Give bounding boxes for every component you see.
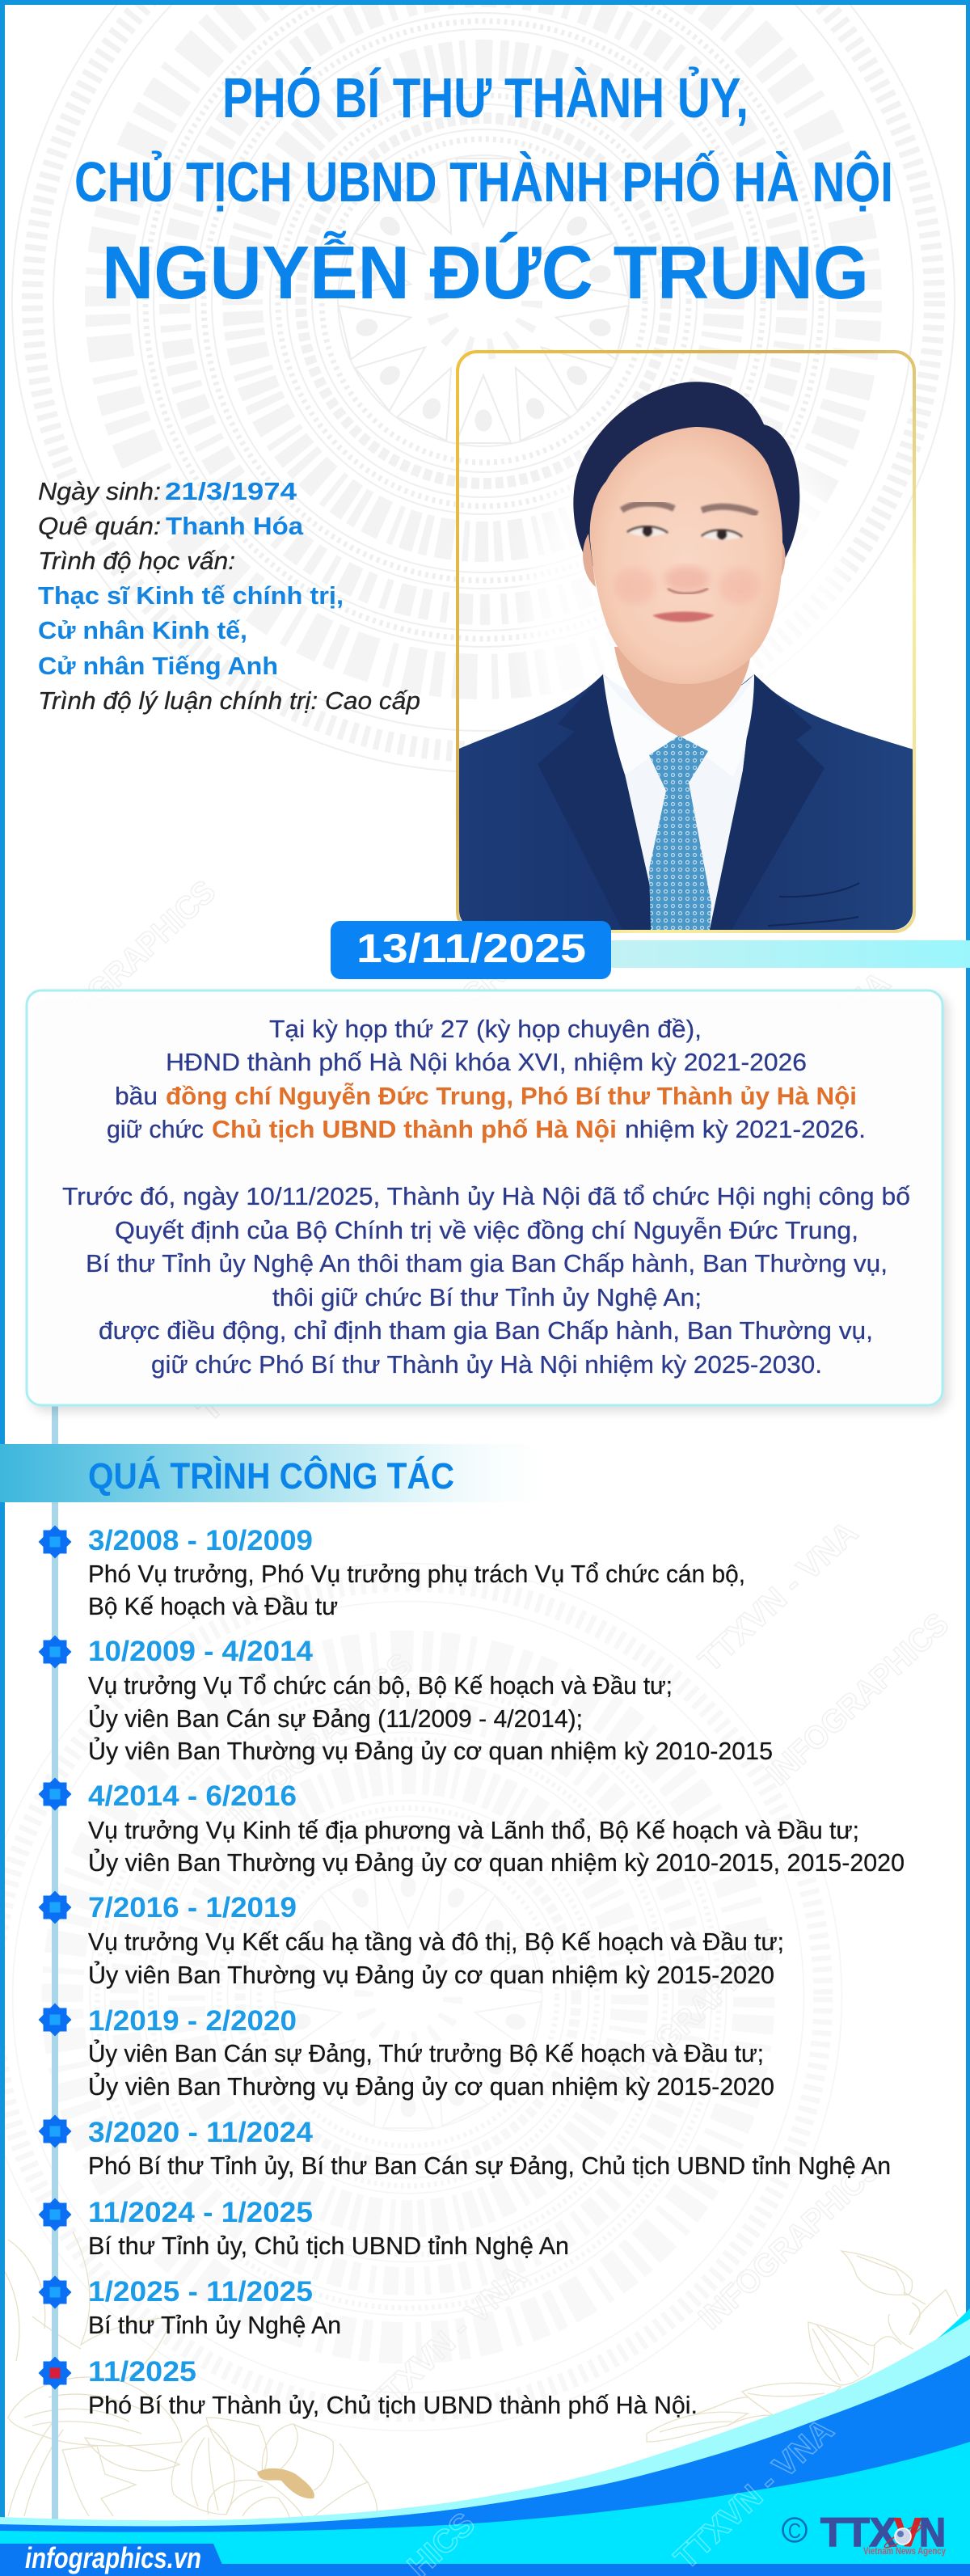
marker	[38, 1777, 72, 1811]
lotus seed pod	[257, 2468, 314, 2498]
portrait: eyes	[627, 526, 742, 540]
portrait: collar	[603, 674, 754, 777]
background: bronze drum pattern lower	[0, 1564, 841, 2430]
timeline entry 9: Phó Bí thư Thành ủy, Chủ tịch UBND thành phố Hà Nội.	[88, 2391, 698, 2419]
logo: TTXVN	[782, 2510, 947, 2557]
portrait: neck	[614, 647, 752, 737]
timeline entry 7	[38, 2197, 569, 2260]
marker	[38, 2275, 72, 2309]
timeline entry 4: Vụ trưởng Vụ Kết cấu hạ tầng và đô thị, Bộ Kế hoạch và Đầu tư;	[88, 1928, 784, 1956]
footer bar	[0, 2564, 970, 2576]
portrait: suit	[459, 674, 913, 930]
timeline entry 3	[38, 1777, 905, 1877]
watermarks: INFOGRAPHICS	[760, 1607, 955, 1793]
paragraph: election: Chủ tịch UBND thành phố Hà Nội	[212, 1115, 617, 1143]
timeline entry 6: 3/2020 - 11/2024	[88, 2117, 314, 2148]
paragraph: prior decision: thôi giữ chức Bí thư Tỉnh ủy Nghệ An;	[272, 1283, 702, 1311]
biography facts: Quê quán:	[38, 512, 161, 540]
copyright mark	[782, 2518, 807, 2543]
marker	[38, 1635, 72, 1669]
portrait: shirt	[603, 674, 754, 930]
watermarks	[27, 874, 955, 2423]
portrait: nose	[664, 566, 710, 592]
biography facts: Ngày sinh:	[38, 477, 161, 505]
portrait: hair back	[573, 382, 799, 566]
portrait: face	[590, 427, 782, 684]
logo wordmark: TTX	[820, 2510, 896, 2555]
logo tagline: Vietnam News Agency	[863, 2547, 947, 2557]
portrait: ears	[583, 534, 786, 587]
website label: infographics.vn	[25, 2541, 201, 2574]
paragraph: election: Tại kỳ họp thứ 27 (kỳ họp chuyên đề),	[269, 1015, 702, 1043]
biography facts: Trình độ học vấn:	[38, 547, 235, 575]
portrait: pocket	[768, 883, 859, 926]
timeline entry 2: Ủy viên Ban Thường vụ Đảng ủy cơ quan nhiệm kỳ 2010-2015	[88, 1736, 773, 1765]
timeline entry 1: 3/2008 - 10/2009	[88, 1525, 313, 1556]
watermarks: TTXVN - VNA	[361, 2258, 534, 2423]
paragraph: prior decision	[62, 1182, 910, 1379]
timeline entry 3: 4/2014 - 6/2016	[88, 1780, 297, 1812]
watermarks: INFOGRAPHICS	[692, 2151, 888, 2337]
marker	[38, 1525, 72, 1559]
portrait: cheeks	[614, 568, 761, 604]
paragraph: election: đồng chí Nguyễn Đức Trung, Phó Bí thư Thành ủy Hà Nội	[166, 1082, 857, 1110]
timeline entry 7: Bí thư Tỉnh ủy, Chủ tịch UBND tỉnh Nghệ An	[88, 2232, 569, 2260]
title: PHÓ BÍ THƯ THÀNH ỦY,	[222, 65, 749, 129]
title: NGUYỄN ĐỨC TRUNG	[102, 230, 869, 315]
watermarks: INFOGRAPHICS	[401, 879, 597, 1065]
timeline entry 1: Bộ Kế hoạch và Đầu tư	[88, 1592, 338, 1620]
timeline entry 4	[38, 1890, 784, 1989]
timeline entry 4: Ủy viên Ban Thường vụ Đảng ủy cơ quan nhiệm kỳ 2015-2020	[88, 1960, 774, 1989]
paragraph: election: HĐND thành phố Hà Nội khóa XVI, nhiệm kỳ 2021-2026	[166, 1048, 807, 1076]
marker	[38, 2198, 72, 2232]
timeline entry 2: Vụ trưởng Vụ Tổ chức cán bộ, Bộ Kế hoạch và Đầu tư;	[88, 1671, 673, 1700]
paragraph: election: bầu	[115, 1082, 158, 1110]
marker	[38, 1890, 72, 1924]
portrait: gold frame	[458, 352, 914, 931]
background: fade of drum below info	[0, 778, 970, 923]
logo wordmark	[820, 2510, 946, 2555]
biography facts: Cử nhân Tiếng Anh	[38, 652, 278, 680]
biography facts: Trình độ lý luận chính trị: Cao cấp	[38, 686, 420, 715]
date strip	[598, 940, 970, 968]
section heading: QUÁ TRÌNH CÔNG TÁC	[88, 1455, 454, 1497]
logo globe	[883, 2523, 923, 2550]
timeline entry 6	[38, 2114, 891, 2180]
timeline entry 2: 10/2009 - 4/2014	[88, 1636, 314, 1667]
timeline entry 8: 1/2025 - 11/2025	[88, 2276, 313, 2308]
timeline entry 9: 11/2025	[88, 2356, 196, 2388]
watermarks: INFOGRAPHICS	[223, 1647, 419, 1833]
paragraph: election: nhiệm kỳ 2021-2026.	[625, 1115, 866, 1143]
copyright mark: C	[788, 2519, 801, 2543]
portrait: tie	[649, 736, 711, 930]
watermarks: TTXVN - VNA	[692, 1514, 865, 1679]
paragraph: election: giữ chức	[107, 1115, 204, 1143]
biography facts: Thạc sĩ Kinh tế chính trị,	[38, 581, 344, 610]
timeline entry 8	[38, 2275, 341, 2339]
marker: current	[38, 2356, 72, 2390]
paragraph: prior decision: Bí thư Tỉnh ủy Nghệ An thôi tham gia Ban Chấp hành, Ban Thường vụ,	[86, 1249, 888, 1277]
footer tab	[0, 2544, 227, 2576]
timeline vertical line	[52, 1406, 58, 2520]
watermarks: INFOGRAPHICS	[668, 1194, 863, 1380]
biography facts: 21/3/1974	[165, 477, 297, 505]
paragraph: prior decision: được điều động, chỉ định tham gia Ban Chấp hành, Ban Thường vụ,	[99, 1316, 873, 1345]
biography facts	[38, 477, 420, 715]
timeline entry 1: Phó Vụ trưởng, Phó Vụ trưởng phụ trách Vụ Tổ chức cán bộ,	[88, 1560, 745, 1588]
portrait: lapels	[538, 674, 824, 930]
date badge	[331, 921, 611, 979]
timeline entry 6: Phó Bí thư Tỉnh ủy, Bí thư Ban Cán sự Đảng, Chủ tịch UBND tỉnh Nghệ An	[88, 2152, 891, 2180]
title	[74, 65, 893, 315]
timeline entry 4: 7/2016 - 1/2019	[88, 1892, 297, 1924]
paragraph: prior decision: giữ chức Phó Bí thư Thành ủy Hà Nội nhiệm kỳ 2025-2030.	[151, 1350, 822, 1379]
timeline entry 3: Vụ trưởng Vụ Kinh tế địa phương và Lãnh thổ, Bộ Kế hoạch và Đầu tư;	[88, 1816, 859, 1844]
watermarks: TTXVN - VNA	[724, 965, 897, 1130]
watermarks: INFOGRAPHICS	[27, 874, 222, 1060]
portrait photo with gold frame	[458, 352, 914, 931]
timeline entry 7: 11/2024 - 1/2025	[88, 2197, 313, 2228]
timeline entry 2: Ủy viên Ban Cán sự Đảng (11/2009 - 4/2014);	[88, 1704, 583, 1733]
logo wordmark: N	[919, 2510, 946, 2555]
marker	[38, 2003, 72, 2037]
timeline entry 5: Ủy viên Ban Cán sự Đảng, Thứ trưởng Bộ Kế hoạch và Đầu tư;	[88, 2038, 764, 2067]
timeline entry 8: Bí thư Tỉnh ủy Nghệ An	[88, 2311, 341, 2339]
timeline entry 5: Ủy viên Ban Thường vụ Đảng ủy cơ quan nhiệm kỳ 2015-2020	[88, 2071, 774, 2101]
timeline entry 1	[38, 1525, 745, 1620]
paragraph: prior decision: Quyết định của Bộ Chính trị về việc đồng chí Nguyễn Đức Trung,	[115, 1216, 858, 1244]
timeline entry 5	[38, 2003, 774, 2101]
portrait: mouth	[652, 611, 715, 622]
paragraph: election	[107, 1015, 866, 1143]
timeline entry 2	[38, 1635, 773, 1765]
lotus line art: bottom right	[647, 2251, 958, 2442]
marker	[38, 2114, 72, 2148]
footer watermark: TTXVN - VNA	[668, 2412, 841, 2576]
portrait: soft halo	[532, 472, 841, 682]
biography facts: Cử nhân Kinh tế,	[38, 616, 247, 644]
timeline entry 9	[38, 2356, 698, 2419]
watermarks: INFOGRAPHICS	[595, 1922, 791, 2108]
lotus line art: bottom left	[0, 2232, 377, 2519]
paragraph: prior decision: Trước đó, ngày 10/11/2025, Thành ủy Hà Nội đã tổ chức Hội nghị công bố	[62, 1182, 910, 1210]
watermarks: TTXVN - VNA	[191, 1264, 364, 1429]
footer waves	[0, 2308, 970, 2576]
logo wordmark: V	[894, 2510, 922, 2555]
footer watermark	[401, 2412, 841, 2576]
panel: election announcement	[27, 990, 943, 1405]
portrait: eyebrows	[622, 503, 757, 514]
timeline entry 3: Ủy viên Ban Thường vụ Đảng ủy cơ quan nhiệm kỳ 2010-2015, 2015-2020	[88, 1848, 905, 1877]
timeline entry 5: 1/2019 - 2/2020	[88, 2005, 297, 2037]
background: bronze drum pattern top	[12, 0, 955, 772]
biography facts: Thanh Hóa	[166, 512, 304, 540]
section heading band	[0, 1444, 566, 1502]
date badge: 13/11/2025	[356, 926, 586, 971]
